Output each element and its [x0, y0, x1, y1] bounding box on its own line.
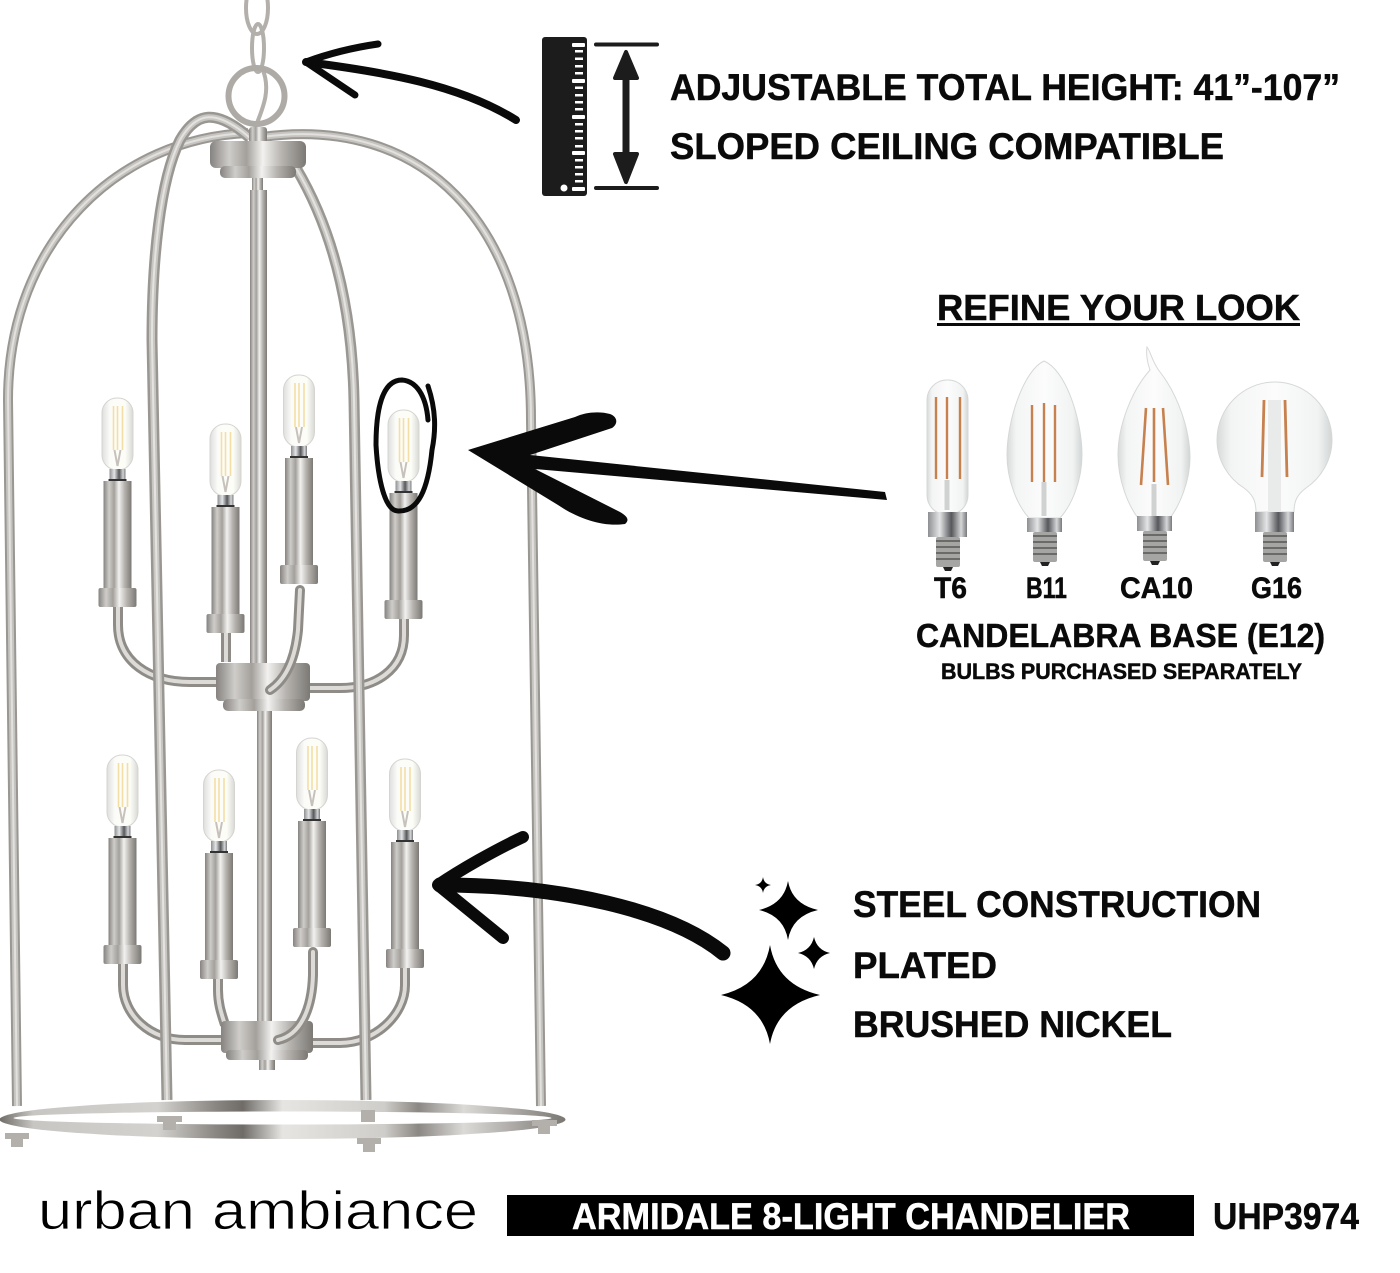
heading: refine your look: REFINE YOUR LOOK [937, 287, 1300, 328]
bulb type labels: B11 [1026, 572, 1067, 605]
bulbs purchased separately text: BULBS PURCHASED SEPARATELY [941, 659, 1302, 684]
hand-drawn circle around bulb [376, 380, 435, 511]
arrow: to metal finish [438, 837, 723, 953]
upper hub [216, 663, 310, 711]
chandelier product photo [0, 0, 566, 1152]
height text: ADJUSTABLE TOTAL HEIGHT: 41”-107” [670, 67, 1340, 108]
inner cage arcs [152, 117, 366, 1100]
material text: STEEL CONSTRUCTION [853, 884, 1261, 925]
central rod [250, 165, 272, 1025]
candelabra base text: CANDELABRA BASE (E12) [916, 617, 1325, 654]
arrow: to bulb [468, 412, 887, 525]
height text [670, 67, 1340, 167]
ruler icon [542, 37, 587, 196]
bulb type labels: T6 [934, 572, 967, 605]
candle arms [118, 606, 405, 1043]
bulb type labels: G16 [1251, 572, 1302, 605]
material text: BRUSHED NICKEL [853, 1004, 1172, 1045]
material text [853, 884, 1261, 1045]
brand logo text: urban ambiance [38, 1181, 478, 1241]
outer cage arcs [8, 133, 541, 1106]
lower hub [221, 1021, 313, 1070]
bulb B11 [1007, 361, 1082, 566]
height text: SLOPED CEILING COMPATIBLE [670, 126, 1224, 167]
front arms over hubs [270, 590, 313, 1040]
sparkle icons [721, 877, 830, 1044]
canopy [210, 127, 306, 178]
chain [246, 0, 268, 128]
model number: UHP3974 [1213, 1196, 1359, 1237]
bulb type labels [934, 572, 1302, 605]
lower tier candles [104, 738, 424, 979]
double-headed height arrow [594, 42, 659, 190]
bulb G16 [1217, 382, 1332, 566]
hanging ring [228, 68, 284, 124]
arrow: to chain [306, 44, 516, 120]
bulb CA10 [1118, 347, 1190, 565]
product name bar: ARMIDALE 8-LIGHT CHANDELIER [572, 1196, 1130, 1237]
ring feet [5, 1110, 557, 1152]
bottom ring [0, 1100, 566, 1139]
upper tier candles [98, 375, 422, 633]
bulb T6 [927, 380, 968, 571]
material text: PLATED [853, 945, 997, 986]
bulb type labels: CA10 [1120, 572, 1193, 605]
